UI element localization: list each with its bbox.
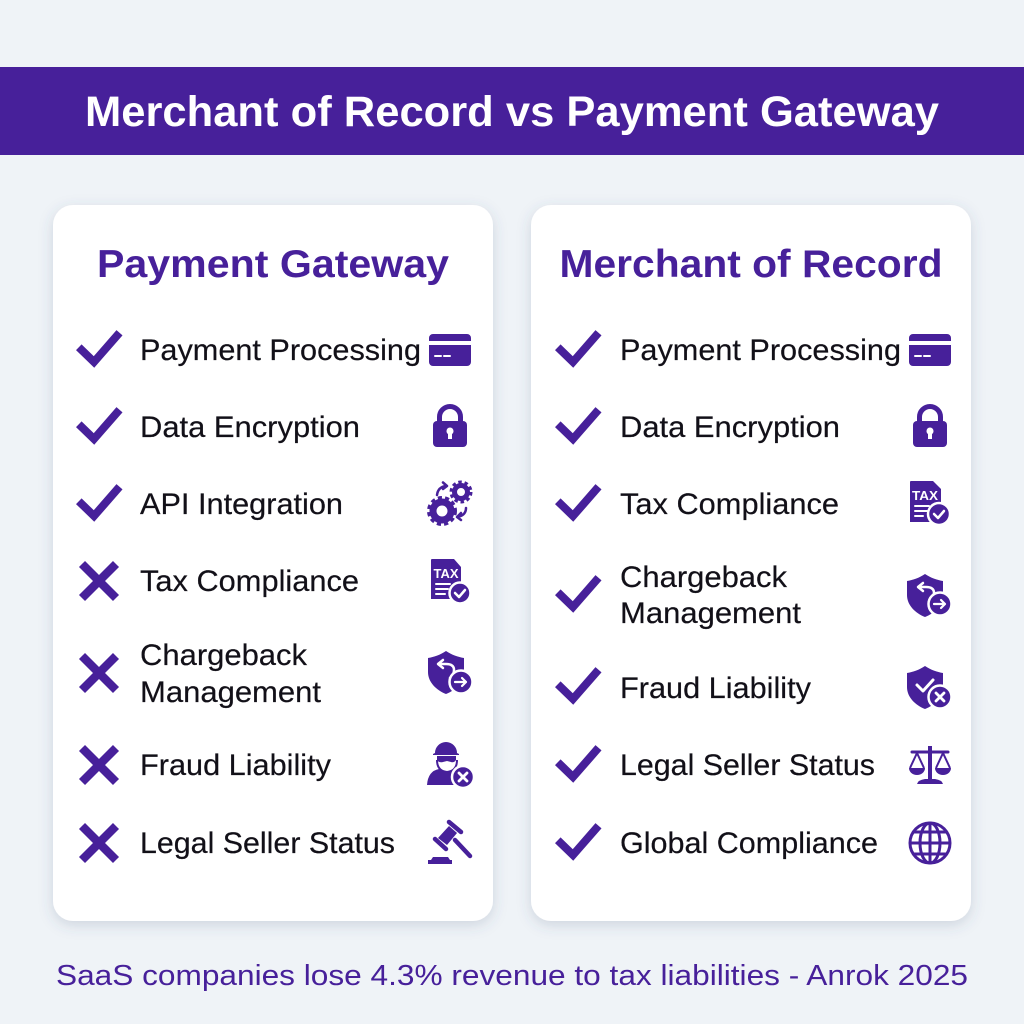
row: data encryption — [79, 406, 467, 447]
icon: shield with arrow — [428, 651, 472, 694]
row: fraud liability: Fraud Liability — [140, 749, 331, 782]
row: chargeback management — [82, 639, 472, 709]
title banner — [0, 67, 1024, 155]
icon: gavel — [428, 822, 470, 864]
row: chargeback management: Chargeback — [140, 639, 308, 672]
panel: payment gateway — [53, 205, 493, 921]
footer source note: SaaS companies lose 4.3% revenue to tax liabilities - Anrok 2025 — [56, 960, 968, 992]
icon: tax document: TAX — [434, 566, 459, 581]
icon: tax document — [431, 559, 470, 604]
title banner: Merchant of Record vs Payment Gateway — [85, 88, 939, 136]
row: api integration — [79, 482, 471, 524]
row: fraud liability — [558, 666, 952, 709]
icon: tax document: TAX — [912, 488, 938, 503]
row: payment processing — [558, 333, 951, 367]
icon: gears — [429, 482, 471, 524]
row: data encryption — [558, 406, 947, 447]
row: api integration: API Integration — [140, 488, 343, 521]
icon: scales — [909, 746, 951, 784]
heading: merchant of record: Merchant of Record — [560, 243, 942, 286]
heading: payment gateway: Payment Gateway — [97, 243, 449, 286]
row: legal seller status — [82, 822, 470, 864]
row: legal seller status — [558, 746, 951, 784]
row: tax compliance: Tax Compliance — [140, 565, 359, 598]
row: tax compliance — [82, 559, 470, 604]
row: chargeback management — [558, 561, 952, 630]
row: payment processing: Payment Processing — [140, 334, 421, 367]
panel: merchant of record — [531, 205, 971, 921]
row: tax compliance: Tax Compliance — [620, 488, 839, 521]
icon: globe — [910, 823, 950, 863]
row: legal seller status: Legal Seller Status — [140, 827, 395, 860]
icon: shield with arrow — [907, 574, 952, 617]
row: chargeback management: Management — [140, 676, 322, 709]
row: global compliance: Global Compliance — [620, 827, 878, 860]
icon: thief — [427, 742, 474, 788]
row: tax compliance — [558, 481, 950, 525]
row: fraud liability: Fraud Liability — [620, 672, 811, 705]
row: data encryption: Data Encryption — [140, 411, 360, 444]
row: fraud liability — [82, 742, 474, 788]
row: chargeback management: Chargeback — [620, 561, 788, 594]
row: payment processing — [79, 333, 471, 367]
icon: tax document — [910, 481, 950, 525]
row: data encryption: Data Encryption — [620, 411, 840, 444]
row: legal seller status: Legal Seller Status — [620, 749, 875, 782]
row: global compliance — [558, 823, 950, 863]
row: payment processing: Payment Processing — [620, 334, 901, 367]
icon: shield with cross — [907, 666, 952, 709]
row: chargeback management: Management — [620, 597, 802, 630]
